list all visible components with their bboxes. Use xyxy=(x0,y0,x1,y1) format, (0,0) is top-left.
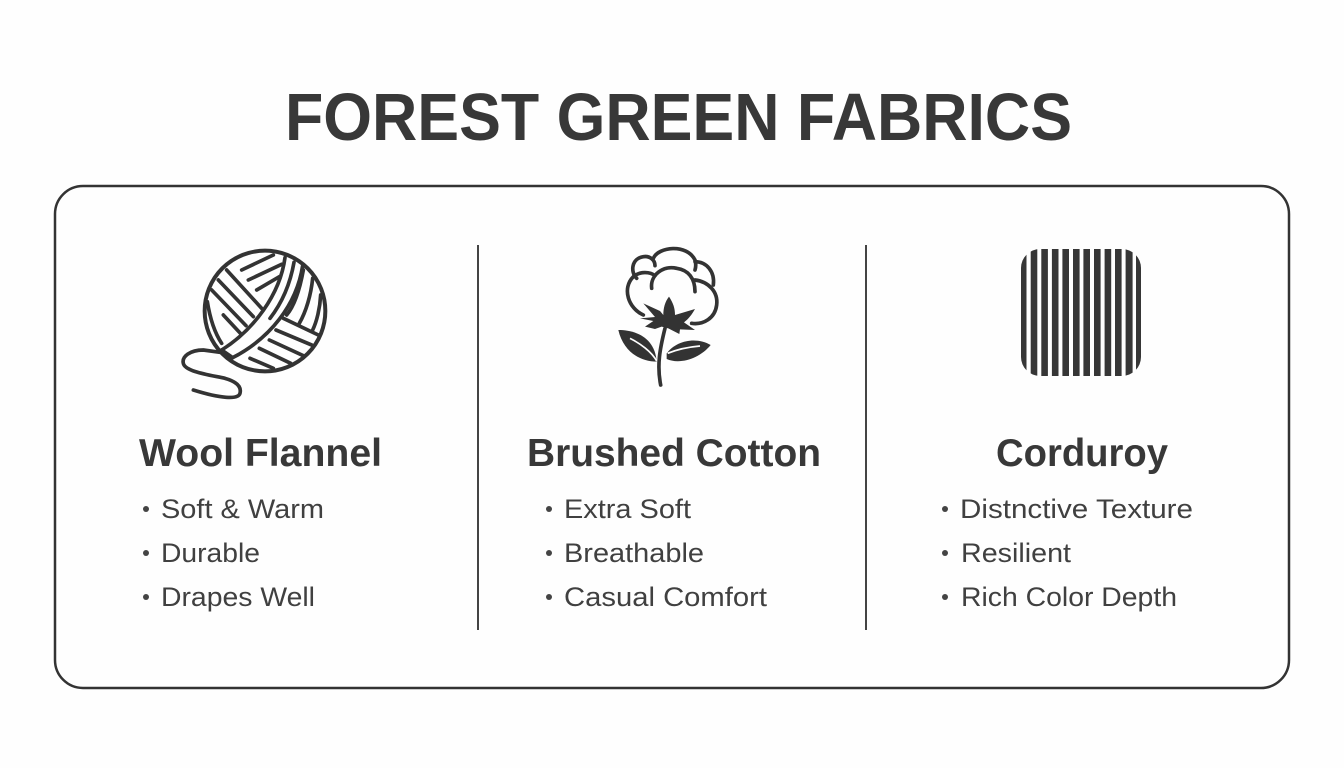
icon: corduroy swatch xyxy=(1021,249,1141,376)
heading: corduroy: Corduroy xyxy=(996,432,1168,475)
title: FOREST GREEN FABRICS xyxy=(285,80,1072,155)
list: corduroy features xyxy=(942,494,1193,612)
list: corduroy features: Resilient xyxy=(961,538,1072,568)
list: brushed cotton features xyxy=(546,494,768,612)
panel: corduroy xyxy=(942,249,1193,612)
icon: yarn ball xyxy=(183,251,325,397)
list: wool flannel features: Durable xyxy=(161,538,260,568)
list: brushed cotton features: Casual Comfort xyxy=(564,582,768,612)
panel: wool flannel xyxy=(139,251,382,612)
list: corduroy features: Distnctive Texture xyxy=(960,494,1193,524)
list: brushed cotton features: Extra Soft xyxy=(564,494,692,524)
icon: cotton plant xyxy=(618,249,717,385)
list: wool flannel features xyxy=(143,494,324,612)
list: wool flannel features: Soft & Warm xyxy=(161,494,324,524)
heading: brushed cotton: Brushed Cotton xyxy=(527,432,821,475)
heading: wool flannel: Wool Flannel xyxy=(139,432,382,475)
list: wool flannel features: Drapes Well xyxy=(161,582,315,612)
panel: brushed cotton xyxy=(527,249,821,612)
list: brushed cotton features: Breathable xyxy=(564,538,704,568)
panel: fabrics card xyxy=(55,186,1289,688)
list: corduroy features: Rich Color Depth xyxy=(961,582,1177,612)
